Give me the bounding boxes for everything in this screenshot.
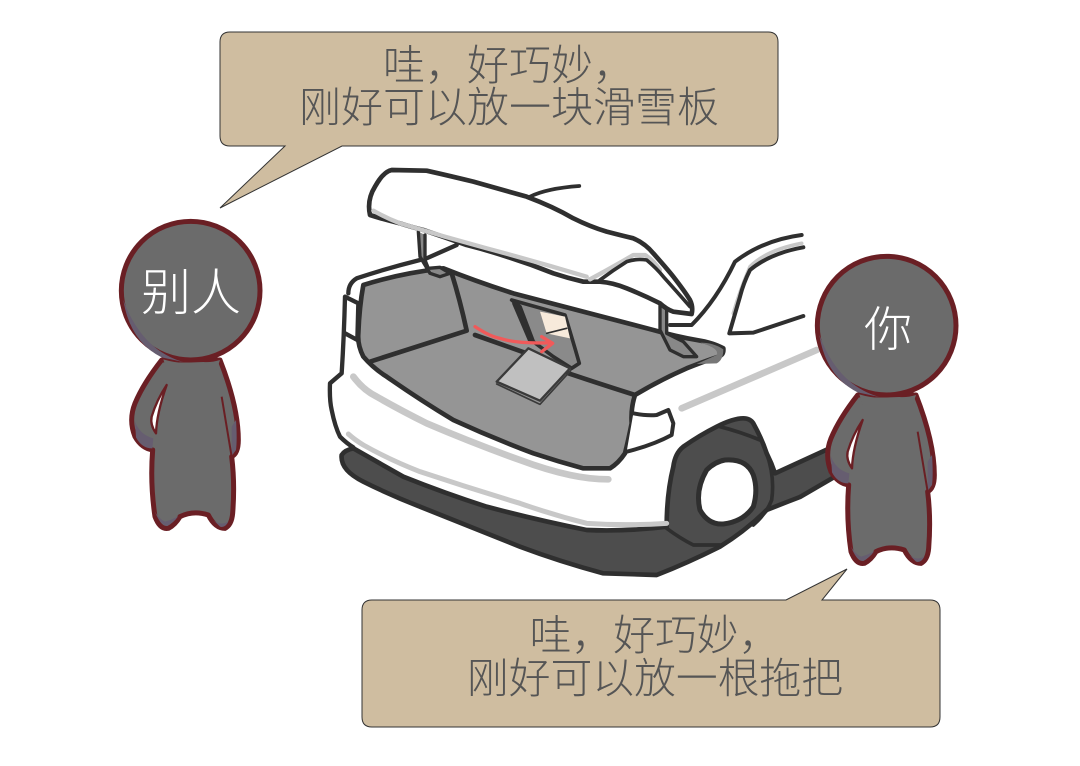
wheel <box>698 460 756 524</box>
trunk interior <box>358 268 723 468</box>
bubble text: you: 刚好可以放一根拖把 <box>467 655 843 702</box>
car <box>330 170 835 575</box>
left hinge <box>418 232 450 277</box>
body highlights <box>353 350 817 479</box>
lower bumper highlight <box>348 434 667 525</box>
label: others: 别人 <box>141 265 241 321</box>
right hinge <box>660 302 697 357</box>
bubble text: you: 哇，好巧妙， <box>530 612 780 659</box>
bubble text: others: 哇，好巧妙， <box>383 42 635 89</box>
trunk lip shadow <box>697 343 723 364</box>
trunk compartments and divider <box>370 273 635 395</box>
speech bubble: others <box>220 32 778 208</box>
trunk lid <box>369 170 692 314</box>
car underbody and wheel arch <box>342 418 835 575</box>
snowboard edge <box>497 371 571 404</box>
bubble text: others: 刚好可以放一块滑雪板 <box>299 84 719 131</box>
figure: you <box>817 256 956 564</box>
speech bubble: you <box>362 569 940 727</box>
seat pass-through opening <box>512 300 579 368</box>
car body outline <box>330 245 457 447</box>
rear window and roof <box>670 235 803 333</box>
snowboard <box>497 348 570 401</box>
figure: others <box>121 221 260 529</box>
red arrow <box>475 327 553 352</box>
label: you: 你 <box>864 304 912 357</box>
right tail light <box>627 410 673 452</box>
antenna <box>530 186 579 197</box>
